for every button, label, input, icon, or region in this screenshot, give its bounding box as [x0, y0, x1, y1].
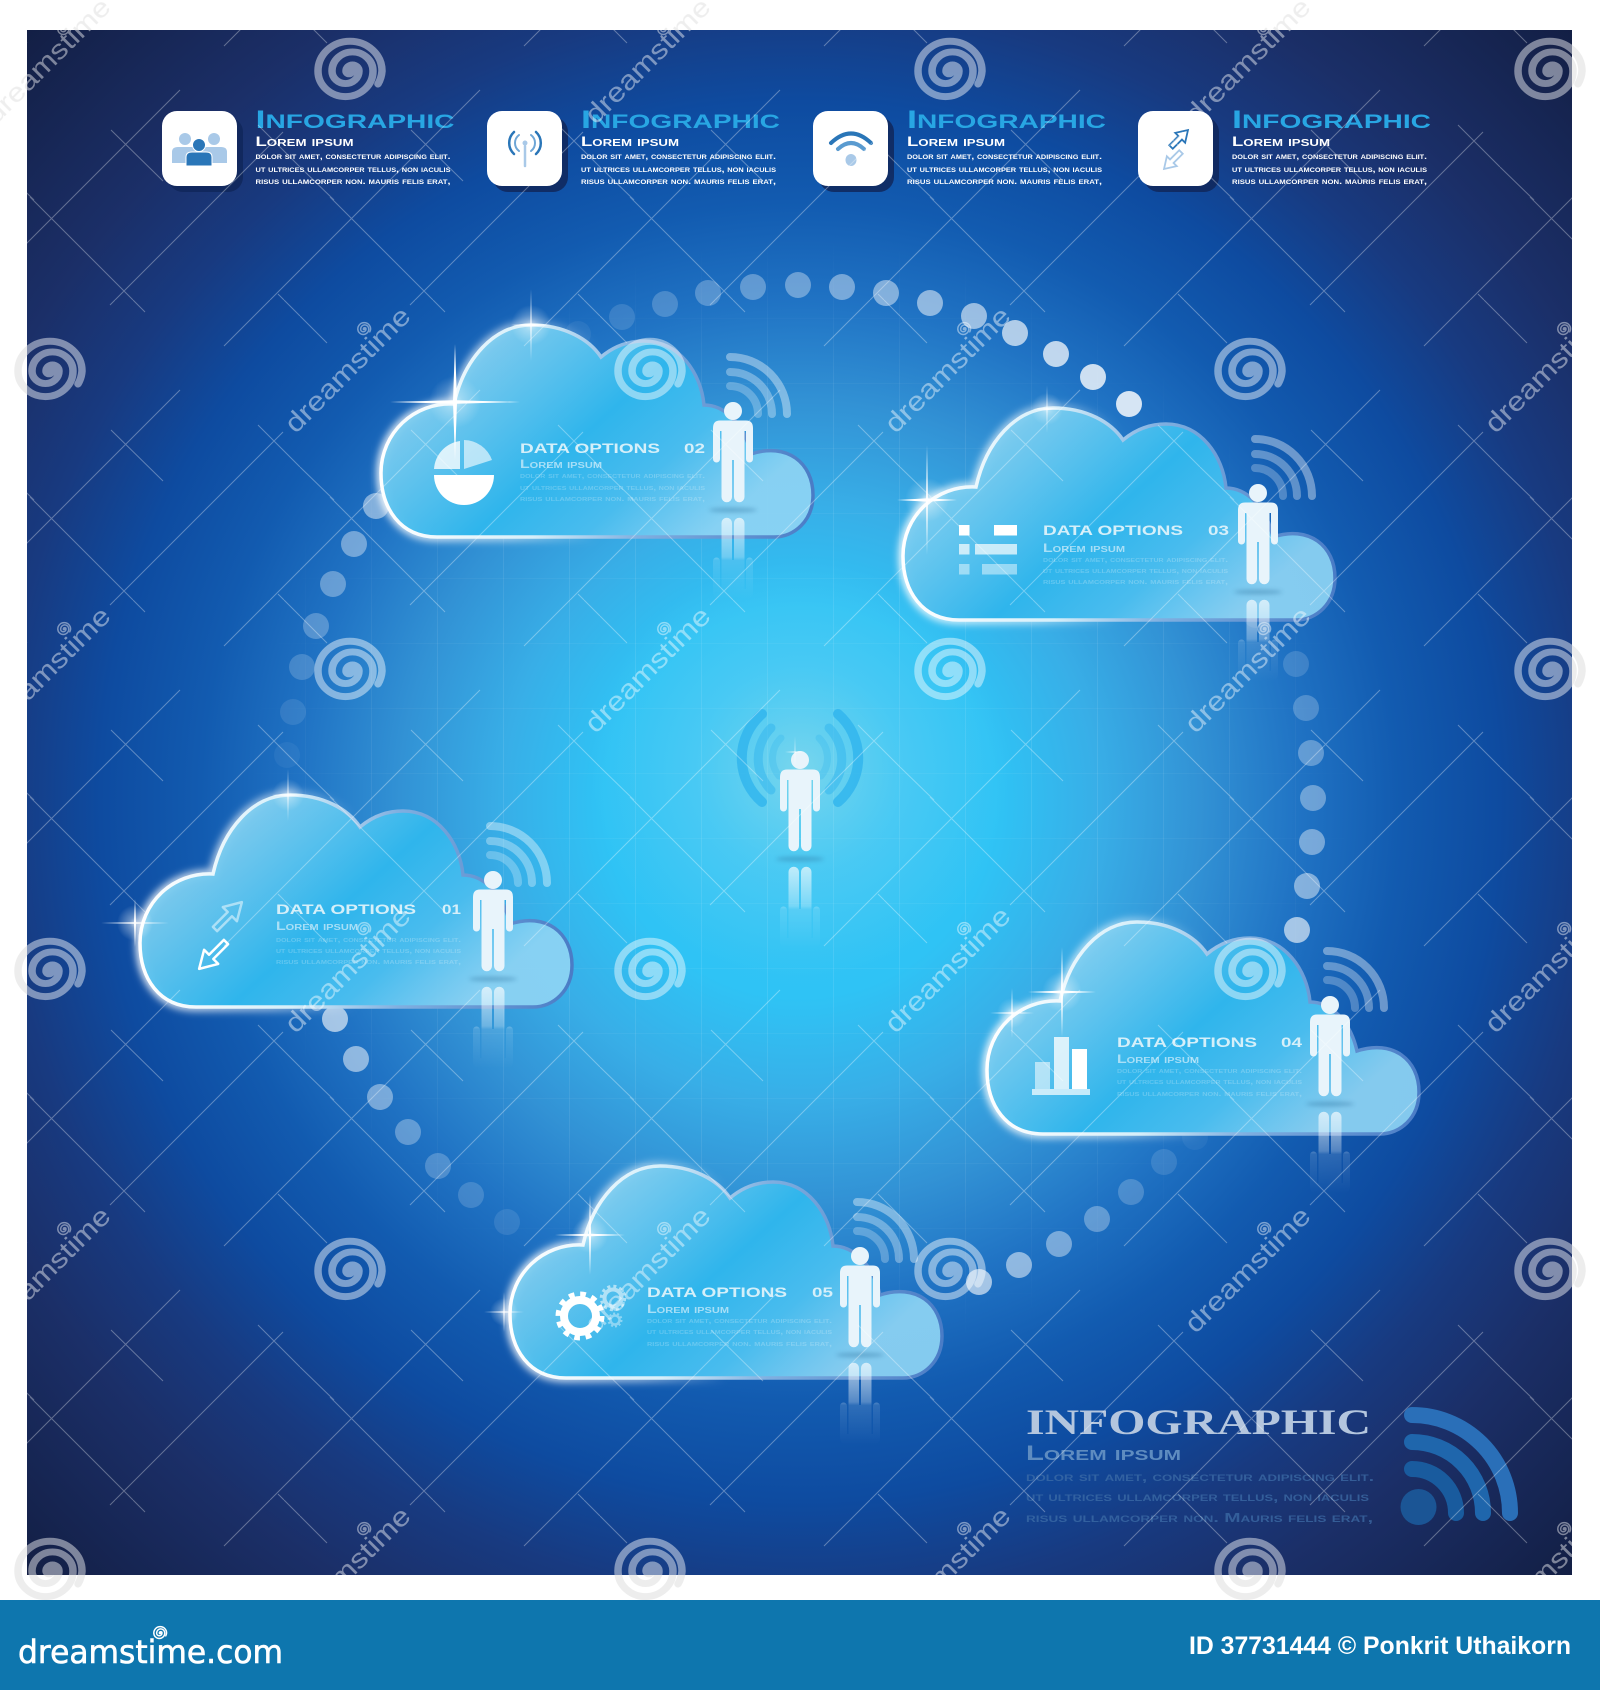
text: data options 02: 02 [684, 440, 705, 456]
sparkle [785, 736, 805, 768]
text: data options 05: 05 [812, 1284, 833, 1300]
text block: header 1 [256, 106, 454, 186]
person [1234, 484, 1282, 682]
cloud 03 [897, 385, 1335, 682]
text: data options 01: dolor sit amet, consectetur adipiscing elit. [276, 937, 461, 944]
text block: header 4 [1232, 106, 1431, 186]
icon: gears [558, 1286, 624, 1338]
text block: header 3: dolor sit amet, consectetur adipiscing eliit. [907, 151, 1102, 161]
bottom right title block: risus ullamcorper non. Mauris felis erat, [1026, 1510, 1373, 1525]
signal arcs [742, 714, 858, 802]
text: data options 03: dolor sit amet, consectetur adipiscing elit. [1043, 557, 1228, 564]
text: data options 02: ut ultrices ullamcorper tellus, non iaculis [520, 485, 706, 492]
text: data options 04: Lorem ipsum [1117, 1054, 1199, 1066]
text block: header 3: INFOGRAPHIC [907, 106, 1106, 134]
text: data options 04: DATA OPTIONS [1117, 1034, 1257, 1050]
central person with signal [742, 714, 858, 948]
sparkles [990, 947, 1096, 1038]
footer bar [0, 1600, 1600, 1690]
icon: diagonal arrows [1159, 125, 1193, 174]
cloud 05 [484, 1166, 942, 1444]
text: data options 01: Lorem ipsum [276, 921, 358, 933]
text block: header 3: ut ultrices ullamcorper tellus, non iaculis [907, 164, 1102, 174]
text: data options 03: DATA OPTIONS [1043, 522, 1183, 538]
cloud 01 [101, 769, 572, 1068]
watermark text with small spirals: dreamstime [279, 301, 417, 439]
footer logo: dreamstime.com [18, 1633, 283, 1671]
text: data options 03: risus ullamcorper non. mauris felis erat, [1043, 579, 1228, 586]
text block: header 2: Lorem ipsum [581, 133, 679, 149]
bottom right title block: dolor sit amet, consectetur adipiscing elit. [1026, 1469, 1374, 1484]
text block: header 1: dolor sit amet, consectetur adipiscing eliit. [256, 151, 450, 161]
watermark text with small spirals: dreamstime [1179, 601, 1317, 739]
text: data options 03: 03 [1208, 522, 1229, 538]
text: data options 04: dolor sit amet, consectetur adipiscing elit. [1117, 1068, 1302, 1075]
icon: people group [172, 133, 227, 166]
text block: header 2: ut ultrices ullamcorper tellus, non iaculis [581, 164, 776, 174]
text: data options 05: Lorem ipsum [647, 1304, 729, 1316]
bottom right title block: ut ultrices ullamcorper tellus, non iaculis [1026, 1489, 1369, 1504]
sparkles [484, 1195, 625, 1332]
icon: list [959, 525, 1017, 574]
text block: header 3 [907, 106, 1106, 186]
watermark text with small spirals: dreamstime [579, 601, 717, 739]
watermark text with small spirals: dreamstime [279, 1501, 417, 1639]
watermark text with small spirals: dreamstime [579, 1201, 717, 1339]
text: data options 02: Lorem ipsum [520, 459, 602, 471]
text: data options 02 [520, 440, 706, 503]
cloud 02 [381, 289, 813, 600]
header item: antenna [487, 106, 780, 192]
text: data options 01: risus ullamcorper non. mauris felis erat, [276, 959, 461, 966]
text: data options 05: DATA OPTIONS [647, 1284, 787, 1300]
text: data options 01: ut ultrices ullamcorper tellus, non iaculis [276, 948, 462, 955]
watermark text with small spirals: dreamstime [1479, 901, 1600, 1039]
text: data options 05: ut ultrices ullamcorper tellus, non iaculis [647, 1329, 833, 1336]
watermark text with small spirals: dreamstime [1479, 1501, 1600, 1639]
icon: wifi [831, 134, 871, 166]
watermark text with small spirals: dreamstime [1179, 1201, 1317, 1339]
bottom right title block: Lorem ipsum [1026, 1442, 1181, 1465]
text: data options 02: dolor sit amet, consectetur adipiscing elit. [520, 473, 705, 480]
text block: header 2 [581, 106, 780, 186]
text block: header 1: Lorem ipsum [256, 133, 354, 149]
text block: header 4: ut ultrices ullamcorper tellus, non iaculis [1232, 164, 1427, 174]
text block: header 1: INFOGRAPHIC [256, 106, 454, 134]
sparkles [897, 385, 1063, 555]
icon: pie chart [434, 440, 494, 505]
text: data options 04 [1117, 1034, 1303, 1098]
text block: header 4: Lorem ipsum [1232, 133, 1330, 149]
icon: bar chart [1032, 1037, 1090, 1095]
watermark text with small spirals: dreamstime [879, 901, 1017, 1039]
watermark text with small spirals: dreamstime [579, 0, 717, 130]
text block: header 2: dolor sit amet, consectetur adipiscing eliit. [581, 151, 776, 161]
sparkles [101, 769, 304, 947]
watermark text with small spirals: dreamstime [879, 1501, 1017, 1639]
text block: header 2: INFOGRAPHIC [581, 106, 780, 134]
watermark text with small spirals: dreamstime [279, 901, 417, 1039]
header item: wifi [813, 106, 1106, 192]
watermark text with small spirals: dreamstime [879, 301, 1017, 439]
text block: header 2: risus ullamcorper non. mauris felis erat, [581, 176, 776, 186]
footer credit: ID 37731444 © Ponkrit Uthaikorn [1189, 1632, 1571, 1660]
person [836, 1247, 884, 1444]
text: data options 01 [276, 901, 462, 966]
text: data options 01: 01 [442, 901, 461, 917]
person figure [776, 751, 824, 948]
person [469, 871, 517, 1068]
text block: header 3: Lorem ipsum [907, 133, 1005, 149]
bottom right title block [1026, 1402, 1374, 1525]
watermark text with small spirals: dreamstime [1179, 0, 1317, 130]
text: data options 05: risus ullamcorper non. mauris felis erat, [647, 1341, 832, 1348]
text: data options 03: ut ultrices ullamcorper tellus, non iaculis [1043, 568, 1229, 575]
text block: header 1: ut ultrices ullamcorper tellus, non iaculis [256, 164, 450, 174]
header item: arrows [1138, 106, 1431, 192]
text: data options 03 [1043, 522, 1229, 586]
icon: antenna [509, 132, 541, 166]
cloud 04 [987, 922, 1419, 1194]
text block: header 4: dolor sit amet, consectetur adipiscing eliit. [1232, 151, 1427, 161]
faint watermark text on top margin [0, 0, 1317, 130]
faint watermark text on top margin: dreamstime [579, 0, 717, 130]
sparkles [390, 289, 551, 460]
text: data options 04: 04 [1281, 1034, 1302, 1050]
header item: people [162, 106, 454, 192]
text: data options 03: Lorem ipsum [1043, 543, 1125, 555]
text block: header 4: INFOGRAPHIC [1232, 106, 1431, 134]
text: data options 04: ut ultrices ullamcorper tellus, non iaculis [1117, 1079, 1303, 1086]
icon: diagonal arrows [192, 895, 249, 976]
faint watermark text on top margin: dreamstime [1179, 0, 1317, 130]
dotted circle connecting clouds [274, 272, 1326, 1295]
text: data options 02: DATA OPTIONS [520, 440, 660, 456]
text block: header 3: risus ullamcorper non. mauris felis erat, [907, 176, 1102, 186]
text: data options 05 [647, 1284, 833, 1348]
watermark text with small spirals: dreamstime [1479, 301, 1600, 439]
person [1306, 996, 1354, 1194]
text: data options 02: risus ullamcorper non. mauris felis erat, [520, 496, 705, 503]
text: data options 05: dolor sit amet, consectetur adipiscing elit. [647, 1318, 832, 1325]
text: data options 04: risus ullamcorper non. mauris felis erat, [1117, 1091, 1302, 1098]
bottom right title block: INFOGRAPHIC [1026, 1402, 1371, 1442]
text: data options 01: DATA OPTIONS [276, 901, 416, 917]
person [709, 402, 757, 600]
text block: header 4: risus ullamcorper non. mauris felis erat, [1232, 176, 1427, 186]
icon: large wifi [1400, 1415, 1510, 1525]
text block: header 1: risus ullamcorper non. mauris felis erat, [256, 176, 450, 186]
